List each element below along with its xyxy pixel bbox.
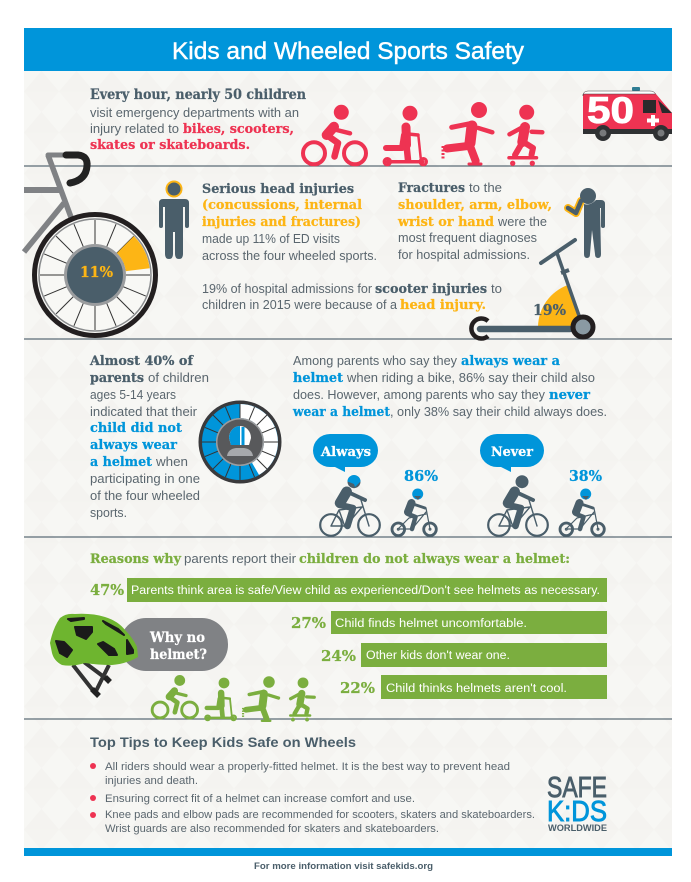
text block: parents who wear helmets: wear a helmet [292, 405, 390, 420]
icon: helmet wheel 60/40 [200, 402, 280, 482]
icon: red wheeled sports figures [303, 102, 542, 165]
text block: almost 40% of parents: always wear [90, 438, 177, 453]
text block: fractures: shoulder, arm, elbow, [398, 198, 552, 213]
text block: parents who wear helmets [292, 354, 607, 420]
icon: skater [243, 676, 279, 721]
text block: serious head injuries: across the four wheeled sports. [202, 249, 377, 263]
text block: almost 40% of parents: a helmet [90, 455, 152, 470]
text block: almost 40% of parents: ages 5-14 years [90, 388, 176, 402]
text block: almost 40% of parents: sports. [90, 506, 127, 520]
text block: almost 40% of parents: Almost 40% of [89, 354, 194, 369]
speech bubble: why no helmet: Why no [149, 630, 205, 646]
icon: child rider with helmet, never group [560, 488, 604, 536]
text block: scooter injuries: children in 2015 were because of a [202, 298, 397, 312]
speech bubble: why no helmet: helmet? [150, 647, 207, 663]
text block: scooter injuries: 19% of hospital admissions for [202, 282, 372, 296]
text block: fractures: to the [469, 181, 502, 195]
logo: Safe Kids Worldwide: WORLDWIDE [548, 823, 607, 834]
stat: 38%: 38% [569, 467, 602, 485]
icon: skateboarder [509, 105, 542, 165]
icon: scooter rider [384, 106, 426, 165]
bar: 27%: Child finds helmet uncomfortable. [335, 618, 527, 630]
title banner [24, 28, 672, 71]
text block: serious head injuries: injuries and fractures) [202, 215, 361, 230]
bar: 47%: Parents think area is safe/View child as experienced/Don't see helmets as necessary. [131, 585, 600, 597]
icon: scooter rider [205, 678, 236, 720]
text block: parents who wear helmets: always wear a [461, 354, 561, 369]
text block: fractures: most frequent diagnoses [398, 231, 537, 245]
text block: almost 40% of parents: child did not [90, 421, 182, 436]
icon: cyclist [152, 675, 198, 718]
text block: fractures: Fractures [398, 181, 465, 196]
text block: serious head injuries: Serious head injuries [202, 182, 354, 197]
bar: 24%: Other kids don't wear one. [366, 650, 510, 662]
text block: fractures: were the [497, 215, 547, 229]
text block: serious head injuries: made up 11% of ED visits [202, 232, 340, 246]
icon: skateboarder [290, 677, 314, 721]
bar: 47%: 47% [90, 581, 124, 599]
bar: 22%: 22% [340, 679, 375, 697]
icon: person with injured arm [568, 188, 605, 258]
text block: scooter injuries: to [491, 282, 502, 296]
list: safety tips: Knee pads and elbow pads are recommended for scooters, skaters and skateboarders. [105, 809, 535, 821]
heading: reasons why: children do not always wear a helmet: [299, 552, 570, 567]
icon: bicycle wheel with 11%: 11% [80, 263, 113, 281]
text block: parents who wear helmets: never [549, 388, 590, 403]
bar: 22% [340, 675, 607, 699]
text block: almost 40% of parents: when [155, 455, 188, 469]
icon: adult rider without helmet [488, 475, 548, 536]
text block: fractures: wrist or hand [397, 215, 494, 230]
text block: almost 40% of parents [89, 354, 209, 520]
icon: cyclist [303, 105, 366, 164]
icon: scooter with 19%: 19% [533, 301, 566, 319]
text block: almost 40% of parents: parents [90, 371, 144, 386]
text block: fractures: for hospital admissions. [398, 248, 530, 262]
icon: bicycle wheel with 11% [24, 155, 156, 336]
speech bubble: never: Never [491, 445, 533, 460]
list: safety tips: Ensuring correct fit of a helmet can increase comfort and use. [105, 793, 415, 805]
icon: ambulance: 50 [587, 90, 634, 131]
bar: 47% [90, 578, 607, 602]
text block: every hour [90, 87, 306, 153]
icon: ambulance [583, 87, 672, 141]
bar: 27%: 27% [291, 614, 326, 632]
text block: parents who wear helmets: helmet [293, 371, 343, 386]
list: safety tips: injuries and death. [105, 775, 198, 787]
text block: serious head injuries: (concussions, internal [202, 198, 362, 213]
icon: skater [443, 102, 492, 164]
icon: green bicycle helmet [50, 614, 138, 696]
list: safety tips: Wrist guards are also recommended for skaters and skateboarders. [105, 823, 439, 835]
text block: every hour: Every hour, nearly 50 children [90, 87, 306, 103]
icon: person with head highlighted [159, 182, 189, 259]
logo: Safe Kids Worldwide: K:DS [547, 796, 607, 828]
icon: scooter with 19% [471, 240, 593, 339]
stat: 86%: 86% [404, 467, 438, 485]
text block: almost 40% of parents: indicated that their [90, 405, 197, 419]
heading: reasons why: parents report their [184, 552, 296, 566]
section dividers [24, 166, 672, 719]
text block: almost 40% of parents: of children [148, 371, 209, 385]
list: safety tips: All riders should wear a properly-fitted helmet. It is the best way to prevent head [105, 761, 510, 773]
footer text: For more information visit safekids.org [254, 861, 433, 872]
speech bubble: always [313, 434, 378, 472]
speech bubble: why no helmet [120, 618, 228, 671]
bar: 24%: 24% [321, 647, 356, 665]
text block: parents who wear helmets: Among parents who say they [293, 354, 458, 368]
text block: parents who wear helmets: when riding a bike, 86% say their child also [346, 371, 595, 385]
text block: fractures [397, 181, 552, 262]
speech bubble: never [480, 434, 544, 472]
heading: reasons why: Reasons why [90, 552, 181, 567]
heading: reasons why [90, 552, 570, 567]
icon: green wheeled sports figures [152, 675, 314, 721]
logo: Safe Kids Worldwide [547, 772, 607, 834]
text block: every hour: visit emergency departments with an [90, 106, 299, 120]
text block: almost 40% of parents: of the four wheeled [90, 489, 200, 503]
bar: 27% [291, 611, 607, 634]
text block: every hour: injury related to [90, 122, 179, 136]
text block: scooter injuries: head injury. [400, 298, 486, 313]
text block: parents who wear helmets: , only 38% say their child always does. [390, 405, 607, 419]
bar: 24% [321, 643, 607, 667]
text block: scooter injuries [202, 282, 502, 313]
heading: top tips: Top Tips to Keep Kids Safe on Wheels [90, 734, 356, 750]
text block: every hour: skates or skateboards. [90, 138, 250, 153]
text block: scooter injuries: scooter injuries [375, 282, 487, 297]
footer bar [24, 848, 672, 856]
speech bubble: always: Always [320, 445, 371, 460]
icon: adult rider with helmet [320, 475, 380, 536]
icon: child rider with helmet [392, 488, 436, 536]
text block: parents who wear helmets: does. However, among parents who say they [293, 388, 546, 402]
text block: every hour: bikes, scooters, [183, 122, 294, 137]
title banner: Kids and Wheeled Sports Safety [172, 38, 524, 65]
text block: serious head injuries [202, 182, 377, 263]
bar: 22%: Child thinks helmets aren't cool. [386, 683, 567, 695]
text block: almost 40% of parents: participating in one [90, 472, 200, 486]
logo: Safe Kids Worldwide: SAFE [547, 772, 607, 804]
list: safety tips [90, 761, 535, 835]
